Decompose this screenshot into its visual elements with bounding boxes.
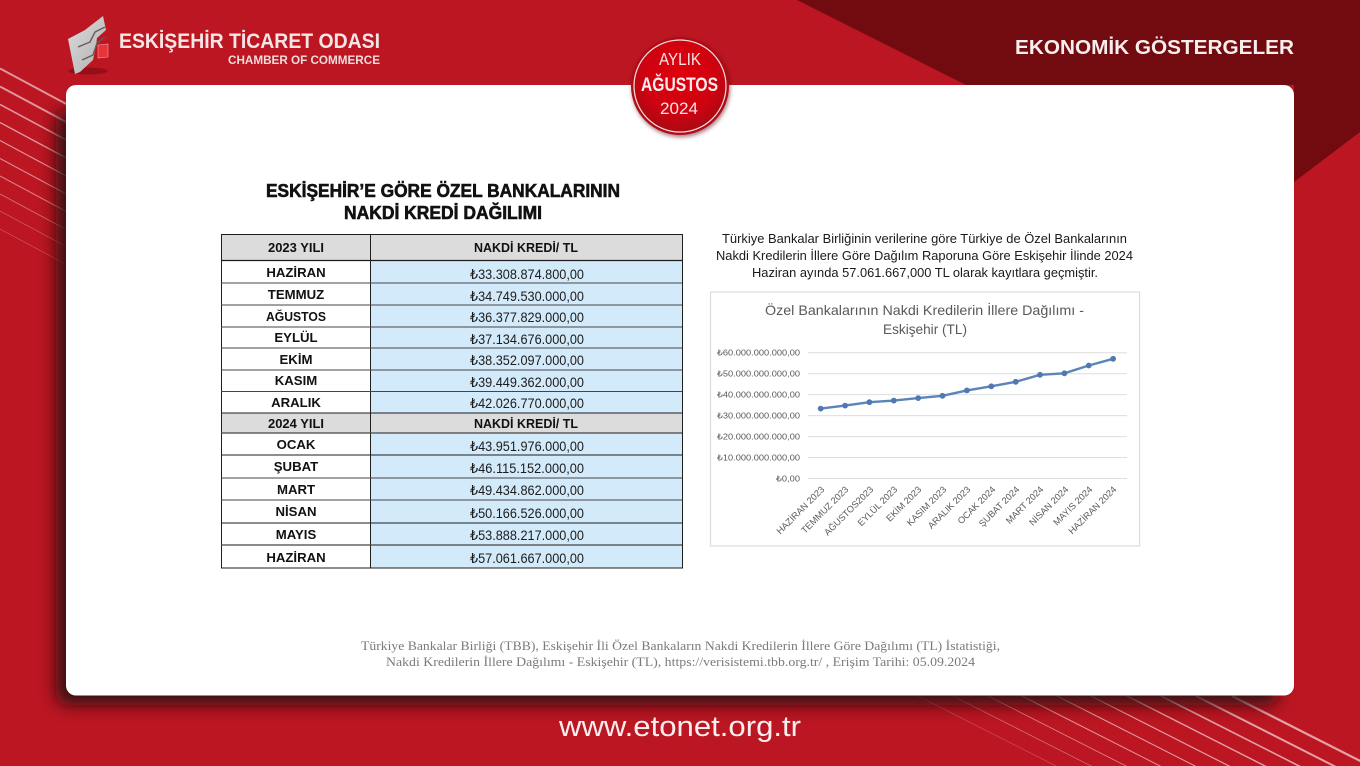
y axis labels: ₺0,00 (776, 474, 800, 484)
section heading: EKONOMİK GÖSTERGELER (1015, 36, 1294, 59)
data line (818, 356, 1116, 412)
x axis labels: HAZİRAN 2023 (775, 484, 826, 536)
table text: ₺38.352.097.000,00 (470, 353, 584, 368)
x axis labels (775, 484, 1118, 538)
x axis labels: ARALIK 2023 (926, 484, 972, 531)
logo icon (68, 16, 108, 74)
table text: NAKDİ KREDİ/ TL (474, 240, 578, 255)
dark red corner shape (797, 0, 1360, 182)
website: www.etonet.org.tr (558, 711, 801, 743)
table text: ₺33.308.874.800,00 (470, 267, 584, 282)
table title (266, 181, 620, 223)
chart title (765, 301, 1084, 337)
chart title: Eskişehir (TL) (883, 321, 967, 337)
y axis labels: ₺20.000.000.000,00 (717, 432, 800, 442)
y axis labels (717, 348, 800, 484)
x axis labels: AĞUSTOS2023 (822, 484, 875, 538)
x axis labels: NİSAN 2024 (1027, 484, 1070, 528)
table text: MART (277, 482, 315, 497)
x axis labels: MAYIS 2024 (1051, 484, 1094, 527)
line chart (710, 292, 1140, 546)
data table (221, 234, 682, 568)
table text: TEMMUZ (268, 287, 324, 302)
chart frame (710, 292, 1140, 546)
table text: ₺36.377.829.000,00 (470, 310, 584, 325)
table text: EKİM (280, 352, 312, 367)
table text: HAZİRAN (266, 550, 326, 565)
x axis labels: ŞUBAT 2024 (977, 484, 1021, 529)
x axis labels: TEMMUZ 2023 (799, 484, 850, 535)
table text: ₺46.115.152.000,00 (470, 461, 584, 476)
source note (361, 638, 1000, 669)
table text: ₺34.749.530.000,00 (470, 289, 584, 304)
table text (266, 240, 584, 566)
table text: ₺53.888.217.000,00 (470, 528, 584, 543)
table text: KASIM (275, 373, 317, 388)
y axis labels: ₺50.000.000.000,00 (717, 368, 800, 378)
x axis labels: OCAK 2024 (956, 484, 997, 526)
badge: month (631, 37, 730, 137)
y axis labels: ₺40.000.000.000,00 (717, 390, 800, 400)
x axis labels: EKİM 2023 (884, 484, 923, 524)
table text: ₺42.026.770.000,00 (470, 396, 584, 411)
x axis labels: KASIM 2023 (905, 484, 948, 528)
logo text (119, 30, 380, 67)
table text: ₺50.166.526.000,00 (470, 506, 584, 521)
x axis labels: HAZİRAN 2024 (1067, 484, 1118, 536)
table text: ₺39.449.362.000,00 (470, 375, 584, 390)
description text: Haziran ayında 57.061.667,000 TL olarak kayıtlara geçmiştir. (752, 266, 1098, 280)
y axis labels: ₺60.000.000.000,00 (717, 348, 800, 358)
badge: month: AĞUSTOS (641, 74, 718, 96)
table text: ŞUBAT (274, 459, 318, 474)
table cell fills (221, 234, 682, 568)
x axis labels: EYLÜL 2023 (856, 484, 899, 528)
table text: ₺57.061.667.000,00 (470, 551, 584, 566)
bottom right diagonal stripes (918, 696, 1360, 766)
table text: NİSAN (275, 504, 317, 519)
y axis labels: ₺10.000.000.000,00 (717, 452, 800, 462)
description text: Nakdi Kredilerin İllere Göre Dağılım Raporuna Göre Eskişehir İlinde 2024 (716, 249, 1133, 263)
left diagonal stripes (0, 68, 70, 266)
badge: month: 2024 (660, 100, 698, 118)
description text: Türkiye Bankalar Birliğinin verilerine göre Türkiye de Özel Bankalarının (722, 232, 1127, 246)
logo text: ESKİŞEHİR TİCARET ODASI (119, 30, 380, 53)
table text: AĞUSTOS (266, 309, 326, 324)
table text: OCAK (277, 437, 316, 452)
table text: 2024 YILI (268, 416, 324, 431)
table text: ₺37.134.676.000,00 (470, 332, 584, 347)
table text: ARALIK (271, 395, 321, 410)
x axis labels: MART 2024 (1004, 484, 1045, 526)
table text: HAZİRAN (266, 265, 326, 280)
logo text: CHAMBER OF COMMERCE (228, 53, 380, 67)
description text (716, 232, 1133, 280)
table title: NAKDİ KREDİ DAĞILIMI (344, 202, 542, 223)
table text: EYLÜL (274, 330, 318, 345)
badge: month: AYLIK (659, 49, 701, 69)
table title: ESKİŞEHİR’E GÖRE ÖZEL BANKALARININ (266, 181, 620, 201)
table text: ₺43.951.976.000,00 (470, 439, 584, 454)
y axis labels: ₺30.000.000.000,00 (717, 410, 800, 420)
source note: Türkiye Bankalar Birliği (TBB), Eskişehir İli Özel Bankaların Nakdi Kredilerin İllere Göre Dağılımı (TL) İstatistiği, (361, 638, 1000, 653)
chart title: Özel Bankalarının Nakdi Kredilerin İllere Dağılımı - (765, 301, 1084, 318)
table text: MAYIS (276, 527, 316, 542)
table text: NAKDİ KREDİ/ TL (474, 416, 578, 431)
table text: 2023 YILI (268, 240, 324, 255)
panel shadow (56, 110, 1278, 705)
table grid (221, 234, 682, 568)
source note: Nakdi Kredilerin İllere Dağılımı - Eskişehir (TL), https://verisistemi.tbb.org.tr/ , Erişim Tarihi: 05.09.2024 (386, 654, 976, 669)
table text: ₺49.434.862.000,00 (470, 483, 584, 498)
main white panel (66, 85, 1294, 696)
